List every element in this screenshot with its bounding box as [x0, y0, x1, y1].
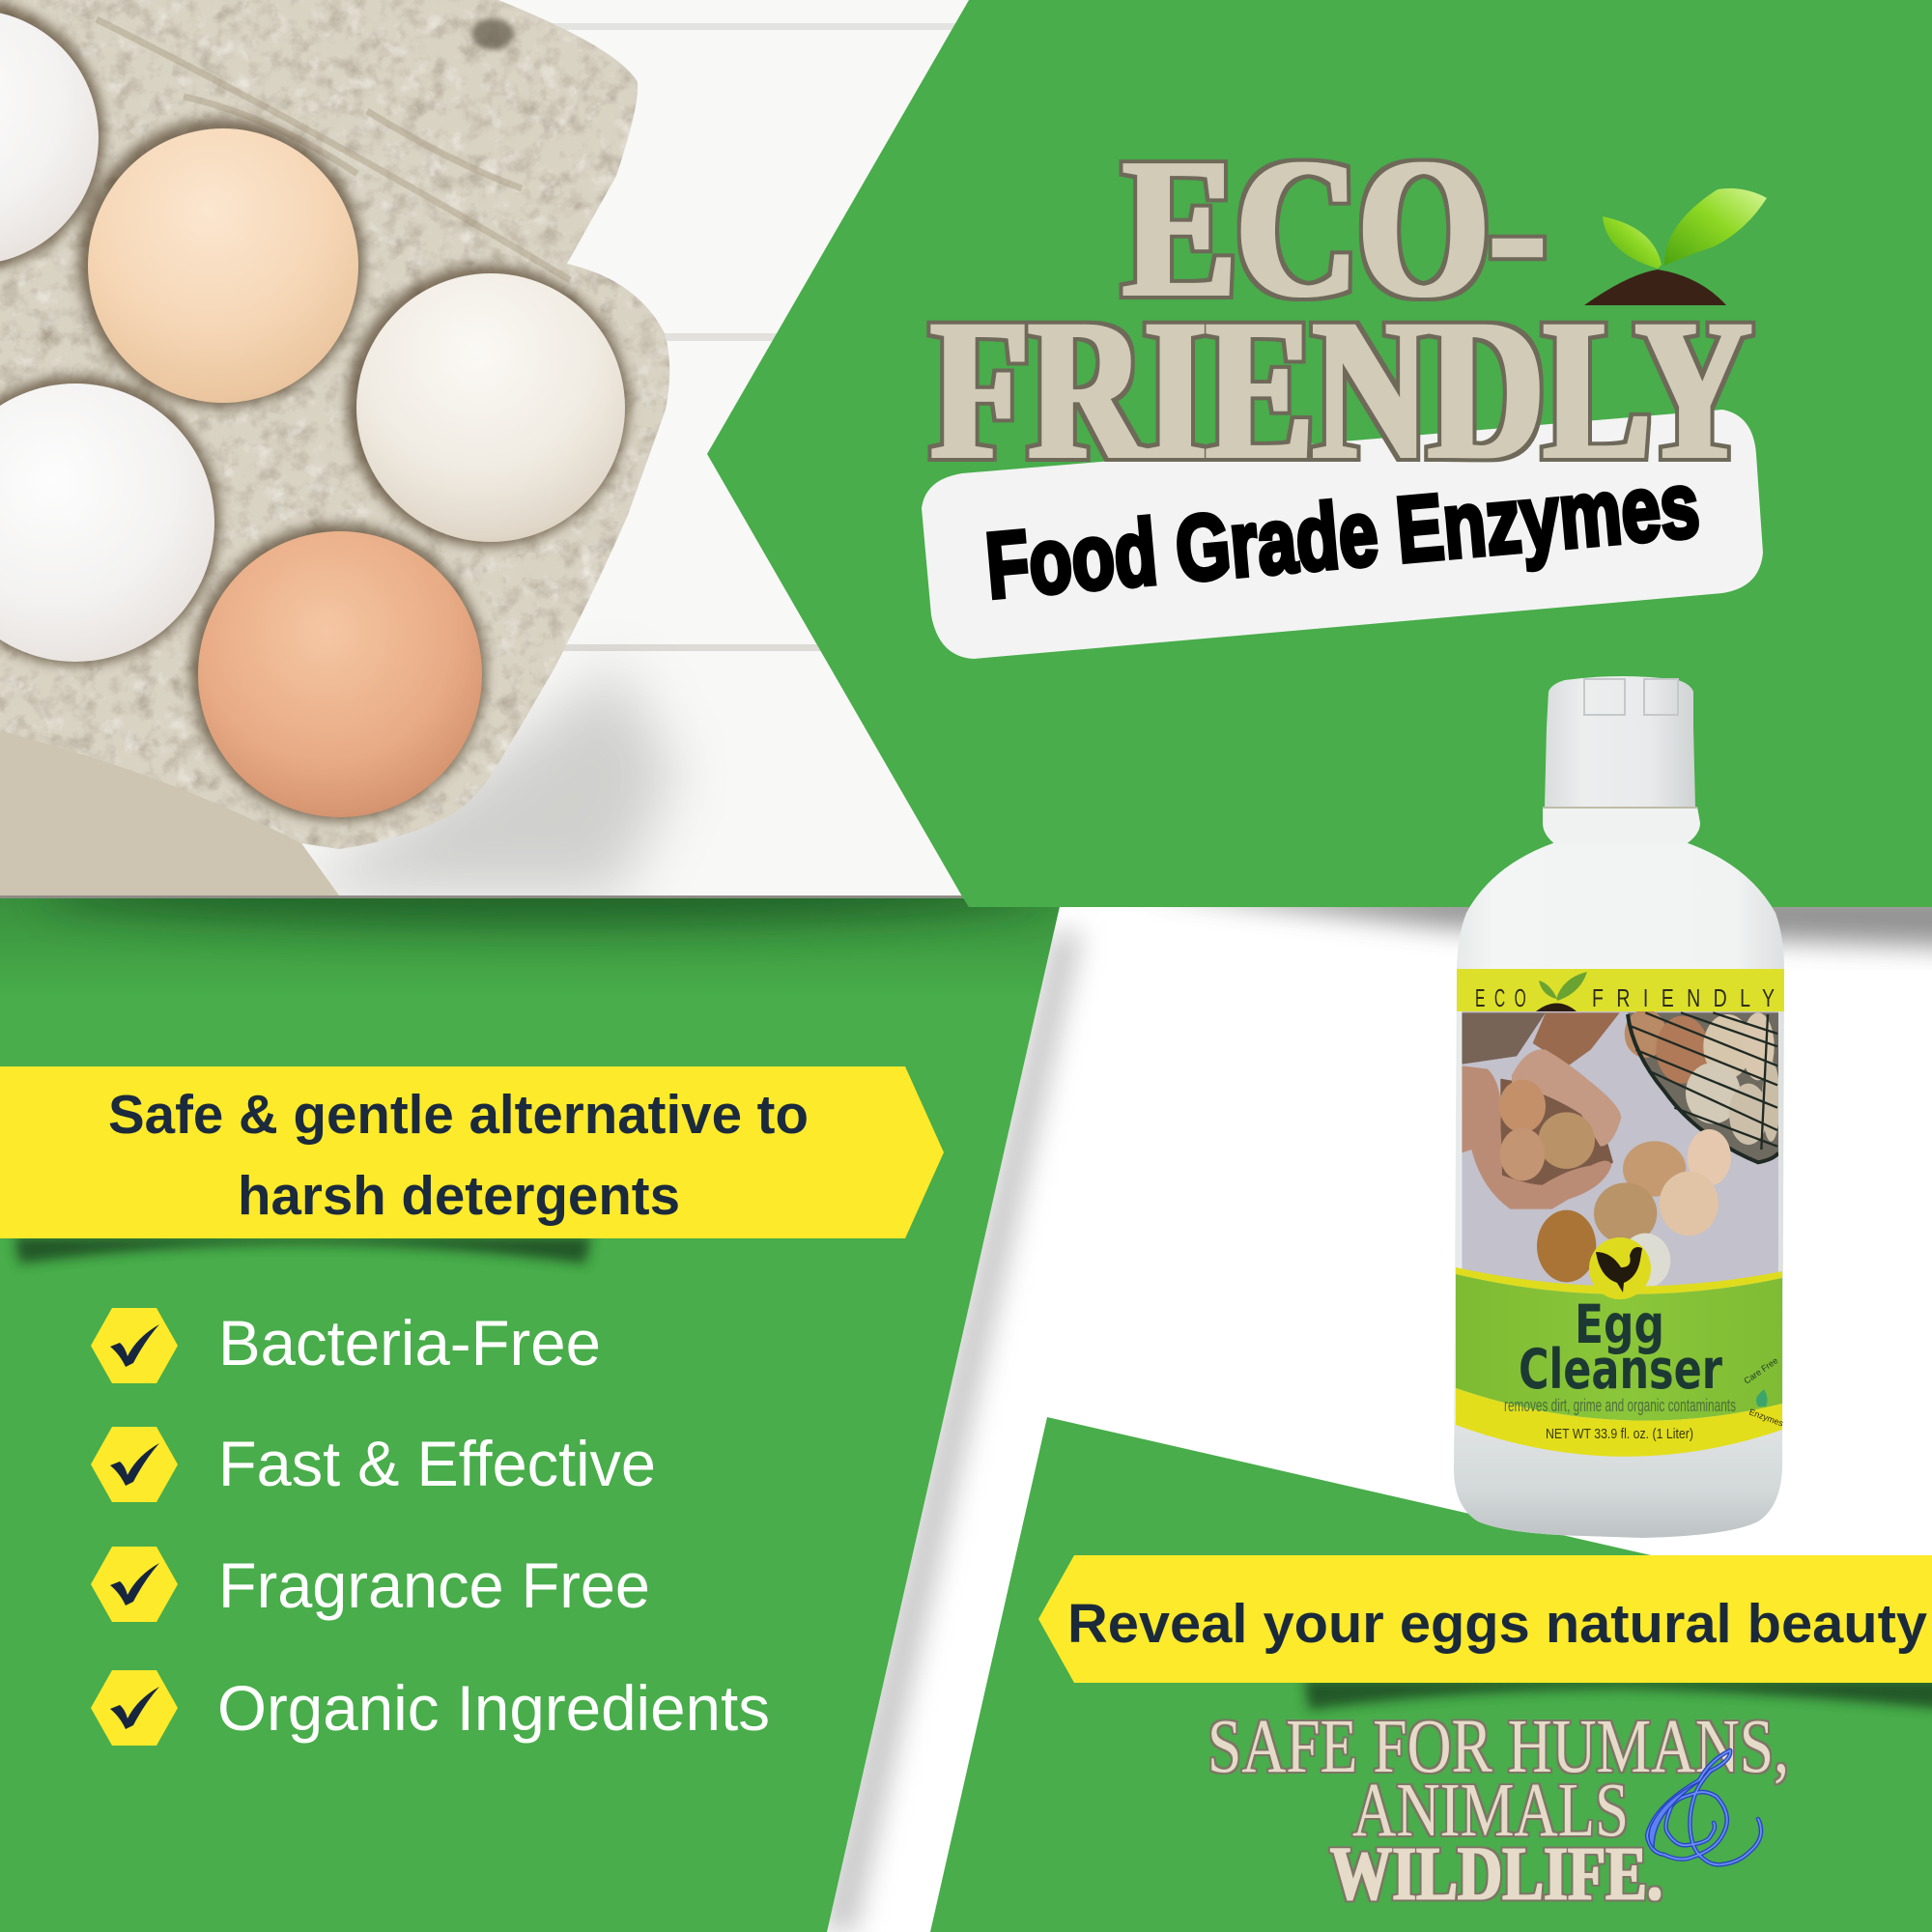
bottle: [1454, 676, 1785, 1538]
soil: [1584, 270, 1726, 305]
banner: safe and gentle: [0, 1066, 944, 1238]
bottle base shade: [1454, 1420, 1782, 1538]
heading line: ECO-: ECO-: [1123, 117, 1546, 338]
care free logo: Care Free: [1742, 1355, 1779, 1386]
egg: white lower left: [0, 384, 214, 662]
shadow under right banner: [1304, 1679, 1932, 1714]
panel: bottom right green panel: [930, 1417, 1932, 1932]
banner text: Reveal your eggs natural beauty: [1067, 1593, 1927, 1655]
product descriptor: removes dirt, grime and organic contaminants: [1504, 1396, 1736, 1415]
item: Bacteria-Free: [91, 1307, 601, 1383]
item: Bacteria-Free: Bacteria-Free: [218, 1307, 601, 1378]
shadow below top panel: [1130, 889, 1932, 952]
photo: eggs in carton on white planks: [0, 0, 976, 895]
cap ring: [1543, 807, 1700, 844]
line: wildlife: WILDLIFE.: [1330, 1833, 1662, 1917]
shadow under left banner: [14, 1236, 591, 1264]
item: Fast & Effective: Fast & Effective: [218, 1428, 656, 1499]
net weight: NET WT 33.9 fl. oz. (1 Liter): [1546, 1427, 1693, 1442]
label top band: [1457, 969, 1784, 1012]
shadow under photo: [0, 898, 1060, 970]
egg pits: [0, 0, 629, 821]
panel: bottom left green panel: [0, 894, 1063, 1932]
egg: brown: [198, 531, 482, 817]
label top band: FRIENDLY: [1592, 983, 1775, 1012]
cap: [1545, 676, 1695, 807]
product name line 2: Cleanser: [1519, 1338, 1722, 1402]
care free logo: Enzymes: [1747, 1406, 1785, 1429]
bottle body: [1454, 842, 1784, 1538]
pill text: Food Grade Enzymes: [982, 453, 1703, 618]
banner: reveal your eggs: [1038, 1555, 1932, 1683]
care free logo: [1742, 1355, 1785, 1429]
banner text line 1: Safe & gentle alternative to: [108, 1084, 809, 1146]
label top band: ECO: [1475, 984, 1526, 1012]
icon: sprout: [1584, 188, 1767, 305]
egg: white top left: [0, 10, 99, 265]
pill: Food Grade Enzymes: [922, 410, 1763, 659]
label green band: [1456, 1237, 1785, 1457]
egg: off-white: [356, 273, 625, 542]
shadow along left panel edge: [821, 932, 1082, 1932]
text: safe for humans, animals and wildlife: [1208, 1705, 1789, 1917]
heading line: FRIENDLY: FRIENDLY: [931, 278, 1751, 500]
list: benefits: [91, 1307, 770, 1746]
icon: script ampersand: [1647, 1750, 1761, 1864]
banner text line 2: harsh detergents: [238, 1165, 680, 1227]
egg carton: [0, 0, 669, 895]
panel: top green arrow panel: [707, 0, 1932, 907]
chicken badge: [1589, 1237, 1651, 1299]
item: Organic Ingredients: Organic Ingredients: [217, 1672, 770, 1744]
line: animals: ANIMALS: [1352, 1769, 1629, 1853]
label photo: [1462, 1011, 1778, 1294]
item: Fragrance Free: Fragrance Free: [218, 1549, 650, 1621]
egg: beige: [88, 128, 358, 403]
product name: Egg: [1575, 1293, 1664, 1355]
photo bottom edge line: [0, 895, 966, 898]
carton fold: [0, 731, 339, 895]
line: safe for humans: SAFE FOR HUMANS,: [1208, 1705, 1789, 1789]
